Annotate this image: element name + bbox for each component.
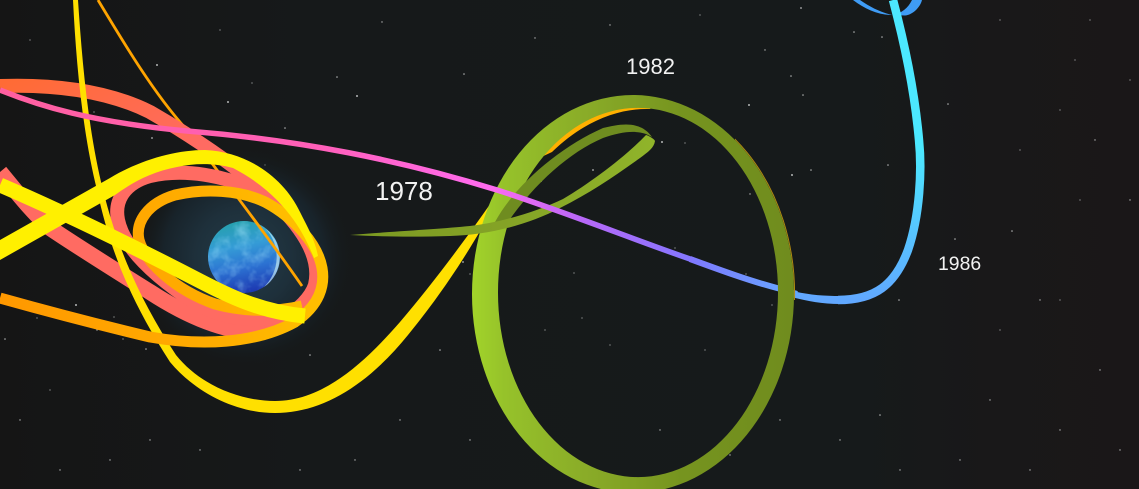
- orbit: blue curl at top: [853, 0, 922, 16]
- orbit: green ring: [472, 95, 794, 489]
- planet glow: [136, 149, 352, 365]
- orbit: amber crescent inside green ring: [535, 99, 660, 160]
- label: 1986: 1986: [938, 253, 981, 275]
- orbit: yellow band crossing down to the ring: [0, 185, 305, 316]
- orbit: coral outer band upper arc: [0, 86, 316, 334]
- orbit: thin orange strand: [98, 0, 302, 286]
- icon: earth planet: [208, 221, 280, 293]
- orbit: blue ribbon behind green ring: [690, 259, 797, 294]
- orbit: yellow ribbon from top to green ring: [73, 0, 512, 413]
- orbit: pink to purple ribbon: [0, 90, 693, 260]
- orbit: cyan ribbon rising to top: [838, 0, 920, 300]
- orbit: coral inner loop: [117, 173, 305, 319]
- label: 1978: 1978: [375, 176, 433, 206]
- orbit: amber ring around earth: [0, 191, 323, 342]
- label: 1982: 1982: [626, 54, 675, 79]
- orbit: yellow band crossing up to the ring: [0, 150, 318, 260]
- orbit: olive loop with tapered tail: [350, 125, 655, 237]
- orbit: amber edge of green ring: [735, 138, 796, 300]
- orbit: coral outer band lower arc: [0, 172, 265, 332]
- orbit: blue taper into cyan ribbon: [793, 292, 840, 304]
